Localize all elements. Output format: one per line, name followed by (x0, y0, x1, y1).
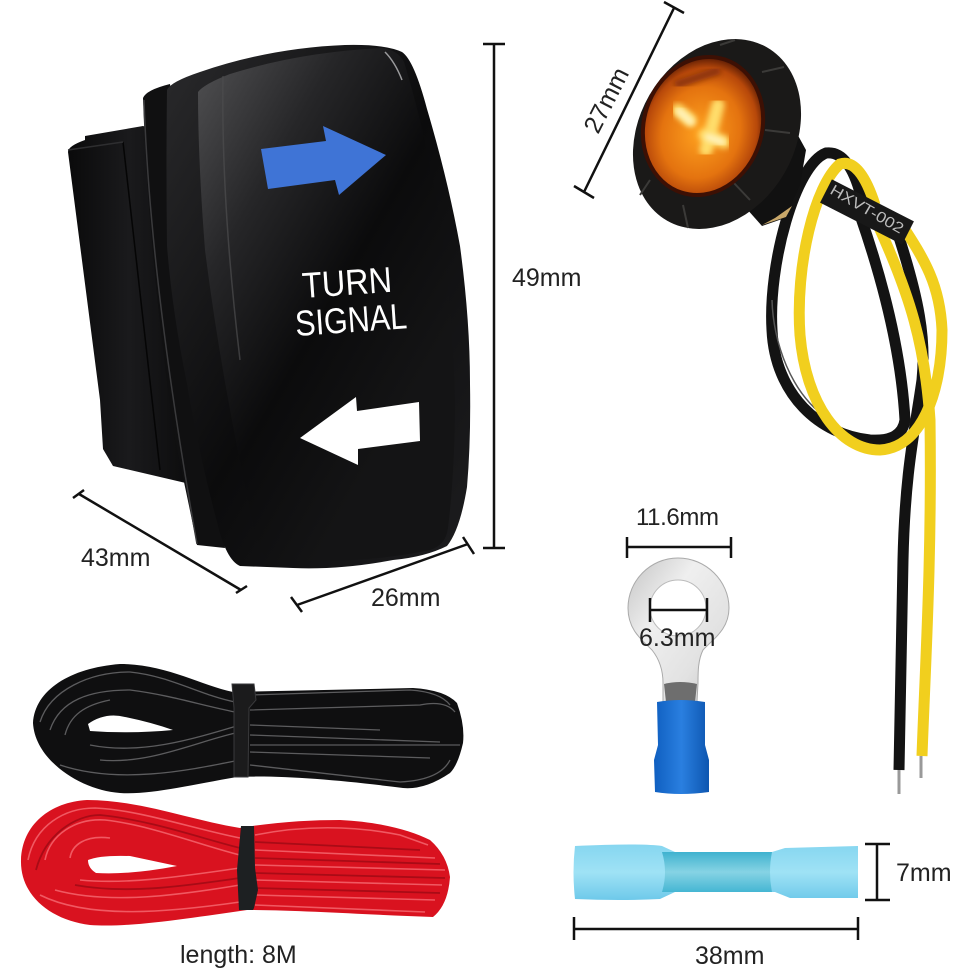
dimension: connector 38mm: 38mm (695, 942, 764, 970)
light collar (730, 130, 806, 226)
metal ring (628, 558, 729, 702)
switch label: TURN (301, 259, 393, 306)
cable tie (232, 684, 256, 777)
dimension: ring outer 11.6mm (627, 504, 731, 558)
switch face (198, 48, 455, 561)
cable tie (237, 826, 258, 910)
switch housing (68, 126, 190, 484)
yellow wire loop (799, 163, 942, 450)
black wire loop (772, 153, 905, 440)
dimension: ring inner 6.3mm: 6.3mm (639, 624, 715, 652)
icon: white left arrow (300, 397, 420, 465)
dimension: switch depth 43mm (73, 490, 247, 593)
dimension: connector 38mm (574, 917, 858, 970)
heat shrink connector (574, 844, 858, 900)
dimension: switch depth 43mm: 43mm (81, 544, 150, 572)
dimension: switch width 26mm (291, 537, 474, 612)
dimension: ring inner 6.3mm (639, 598, 715, 652)
blue insulator (654, 700, 709, 794)
wire sleeve (826, 191, 908, 233)
switch label (294, 259, 408, 344)
icon: blue right arrow (261, 126, 386, 195)
amber marker light with wires: HXVT-002 (827, 182, 907, 237)
dimension: connector 7mm (865, 844, 952, 900)
wire coil opening (88, 716, 173, 732)
dimension: switch width 26mm: 26mm (371, 584, 440, 612)
bezel (599, 8, 835, 260)
rocker switch (68, 45, 470, 568)
red wire coil (21, 800, 450, 926)
wire tips (899, 756, 921, 794)
black wire coil (33, 664, 463, 793)
switch flange (143, 84, 225, 548)
dimension: light 27mm: 27mm (578, 63, 635, 138)
amber lens (625, 41, 781, 211)
dimension: switch height 49mm: 49mm (512, 264, 581, 292)
dimension: light 27mm (574, 2, 684, 198)
wire length label: length: 8M (180, 941, 297, 969)
yellow wire lead (878, 225, 930, 756)
dimension: ring outer 11.6mm: 11.6mm (636, 504, 719, 531)
switch label: SIGNAL (294, 295, 408, 344)
black wire lead (895, 225, 923, 770)
dimension: connector 7mm: 7mm (896, 859, 952, 887)
amber marker light with wires (599, 8, 942, 794)
ring terminal (628, 558, 729, 794)
switch rim (166, 45, 470, 568)
dimension: switch height 49mm (483, 44, 581, 548)
wire coil opening (88, 856, 177, 873)
